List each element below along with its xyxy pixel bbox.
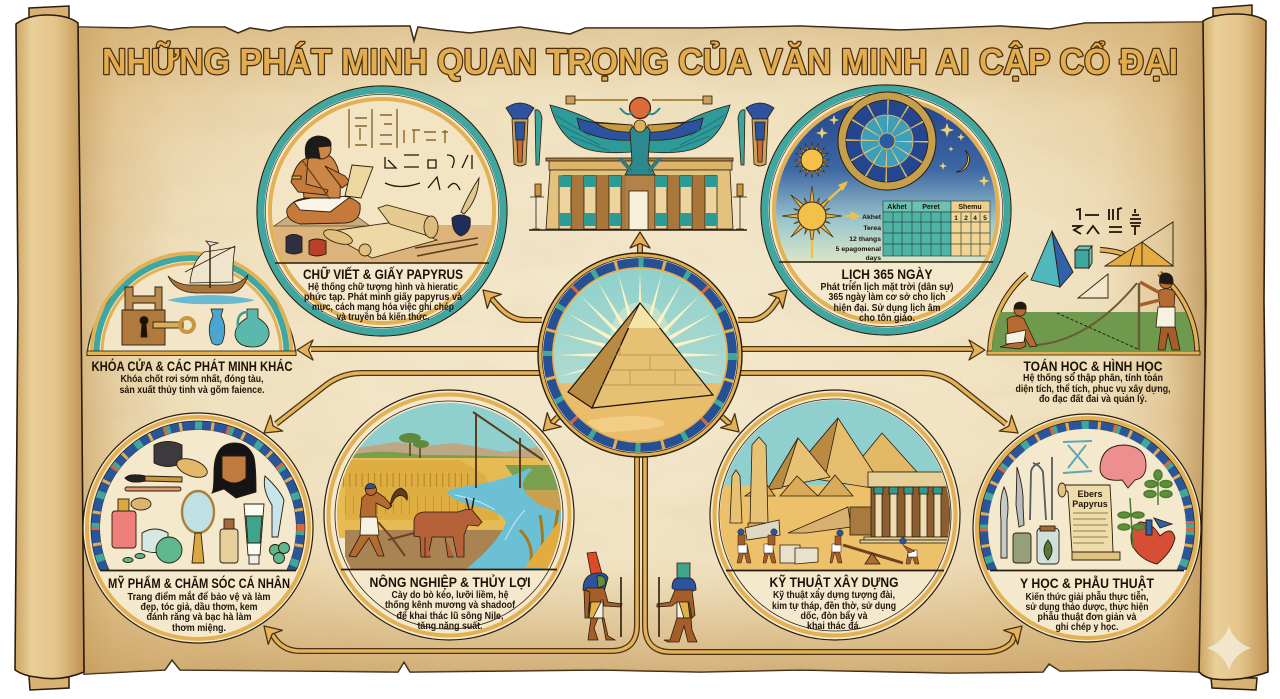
illustration: sky and calendar: 5 (983, 215, 987, 222)
text: agriculture: thống kênh mương và shadoof (385, 599, 516, 611)
heading: writing: CHỮ VIẾT & GIẤY PAPYRUS (303, 267, 463, 282)
text: construction (772, 590, 896, 632)
numerals (1072, 208, 1141, 235)
text: writing: mực, cách mạng hóa việc ghi chép (312, 302, 454, 313)
panel: construction engineering (710, 390, 960, 640)
text: cosmetics: Trang điểm mắt để bảo vệ và làm (128, 590, 271, 603)
text: medicine (1026, 590, 1149, 633)
icon: lotus vase left (506, 103, 542, 166)
title: NHỮNG PHÁT MINH QUAN TRỌNG CỦA VĂN MINH AI CẬP CỔ ĐẠI (102, 39, 1178, 82)
illustration: cosmetics (100, 430, 296, 570)
wheat (519, 510, 560, 566)
heading: locks: KHÓA CỬA & CÁC PHÁT MINH KHÁC (92, 359, 293, 374)
illustration: sky and calendar: Akhet (887, 204, 907, 211)
text: locks: sản xuất thủy tinh và gốm faience. (120, 384, 265, 396)
illustration: sky and calendar: Terea (863, 225, 881, 232)
plough and ox (378, 498, 482, 557)
illustration: sky and calendar: 2 (964, 215, 968, 222)
panel: mathematics and geometry (985, 208, 1205, 405)
text: calendar: hiện đại. Sử dụng lịch âm (834, 303, 941, 314)
text: writing: và truyền bá kiến thức. (336, 311, 430, 323)
text: calendar: Phát triển lịch mặt trời (dân sự) (820, 281, 954, 293)
heading: cosmetics: MỸ PHẨM & CHĂM SÓC CÁ NHÂN (108, 576, 290, 591)
text: construction: Kỹ thuật xây dựng tượng đài, (773, 590, 895, 601)
illustration: pyramid (554, 269, 726, 441)
illustration: medical tools: Papyrus (1072, 499, 1108, 509)
text: mathematics: đo đạc đất đai và quản lý. (1039, 393, 1147, 405)
scribe figure (287, 136, 373, 224)
text: writing: phức tạp. Phát minh giấy papyrus và (304, 291, 462, 303)
icon: golden triangle (1078, 222, 1173, 298)
text: medicine: Kiến thức giải phẫu thực tiễn, (1026, 590, 1149, 603)
illustration: sky and calendar: Peret (922, 204, 940, 211)
workers (737, 529, 919, 564)
illustration: field and surveyors (985, 273, 1205, 352)
text: construction: dốc, đòn bẩy và (800, 610, 868, 622)
panel: cosmetics and personal care (83, 413, 313, 643)
calendar table (883, 201, 990, 256)
text: calendar (820, 281, 954, 324)
text: calendar: cho tôn giáo. (859, 313, 915, 324)
moon (956, 150, 969, 172)
illustration: sky and calendar (770, 90, 1000, 265)
zodiac wheel (838, 92, 936, 190)
text: calendar: 365 ngày làm cơ sở cho lịch (828, 292, 946, 303)
heading: construction: KỸ THUẬT XÂY DỰNG (770, 575, 898, 590)
illustration: scribe (270, 90, 495, 265)
icon: glass vase and jug (209, 309, 269, 347)
text: agriculture: để khai thác lũ sông Nile, (396, 610, 504, 622)
heading: medicine: Y HỌC & PHẪU THUẬT (1020, 576, 1155, 591)
illustration: sky and calendar: Akhet (862, 214, 882, 221)
heading: mathematics: TOÁN HỌC & HÌNH HỌC (1024, 359, 1163, 374)
text: writing: Hệ thống chữ tượng hình và hieratic (308, 281, 458, 293)
icon: blue pyramid and cube (1031, 231, 1092, 287)
panel: locks and other inventions (87, 241, 296, 396)
icon: sparkle watermark (1207, 626, 1251, 670)
panel: medicine and surgery (973, 414, 1201, 642)
panel: central pyramid (538, 253, 742, 457)
text: construction: kim tự tháp, đền thờ, sử dụng (772, 600, 896, 612)
winged falcon (550, 96, 730, 175)
panel: writing and papyrus (257, 86, 507, 336)
illustration: sky and calendar: 1 (954, 215, 958, 222)
text: mathematics: diện tích, thể tích, phục vụ xây dựng, (1016, 383, 1171, 395)
suns (782, 142, 860, 258)
illustration: medical tools (985, 425, 1190, 575)
illustration: sky and calendar: days (866, 255, 881, 262)
text: medicine: ghi chép y học. (1056, 622, 1119, 633)
icon: ship (167, 241, 255, 304)
panel: calendar (761, 85, 1011, 335)
heading: calendar: LỊCH 365 NGÀY (842, 267, 932, 282)
text: agriculture: tăng năng suất. (418, 620, 483, 632)
ink pots and pens (286, 178, 479, 256)
icon: wooden lock and key (122, 287, 194, 345)
right roller (1199, 5, 1268, 690)
illustration: medical tools: Ebers (1077, 489, 1103, 499)
papyrus scroll (322, 205, 438, 258)
illustration: sky and calendar: 12 thangs (849, 236, 881, 243)
icon: lotus vase right (738, 103, 774, 166)
arrows from central pyramid (257, 232, 1029, 652)
panel: agriculture and irrigation (324, 390, 574, 640)
text: agriculture: Cày do bò kéo, lưỡi liềm, hệ (392, 589, 509, 601)
illustration: farming by the Nile (335, 400, 570, 570)
text: cosmetics: đánh răng và bạc hà làm (146, 612, 252, 623)
text: medicine: sử dụng thảo dược, thực hiện (1026, 602, 1148, 613)
temple building (529, 158, 747, 230)
shadoof (473, 412, 543, 488)
text: mathematics (1016, 372, 1171, 405)
text: locks: Khóa chốt rơi sớm nhất, đóng tàu, (120, 373, 264, 385)
panel: temple and winged falcon (506, 96, 774, 230)
left roller (15, 6, 84, 690)
icon: Horus figure (583, 552, 622, 640)
text: locks (120, 373, 265, 396)
text: cosmetics (128, 590, 271, 634)
text: mathematics: Hệ thống số thập phân, tính toán (1023, 372, 1163, 384)
icon: Thoth figure (657, 563, 697, 642)
text: construction: khai thác đá. (807, 621, 861, 632)
hieroglyph rows (349, 109, 448, 148)
illustration: sky and calendar: Shemu (958, 204, 982, 211)
heading: agriculture: NÔNG NGHIỆP & THỦY LỢI (370, 575, 530, 590)
text: agriculture (385, 589, 516, 632)
farmer (349, 484, 407, 557)
text: writing (304, 281, 462, 323)
trees (410, 440, 420, 458)
text: medicine: phẫu thuật đơn giản và (1038, 610, 1137, 623)
text: cosmetics: thơm miệng. (172, 623, 226, 634)
illustration: sky and calendar: 5 epagomenal (836, 246, 881, 253)
illustration: sky and calendar: 4 (973, 215, 977, 222)
illustration: pyramids and temple (720, 400, 950, 575)
text: cosmetics: đẹp, tóc giả, dầu thơm, kem (140, 601, 258, 613)
